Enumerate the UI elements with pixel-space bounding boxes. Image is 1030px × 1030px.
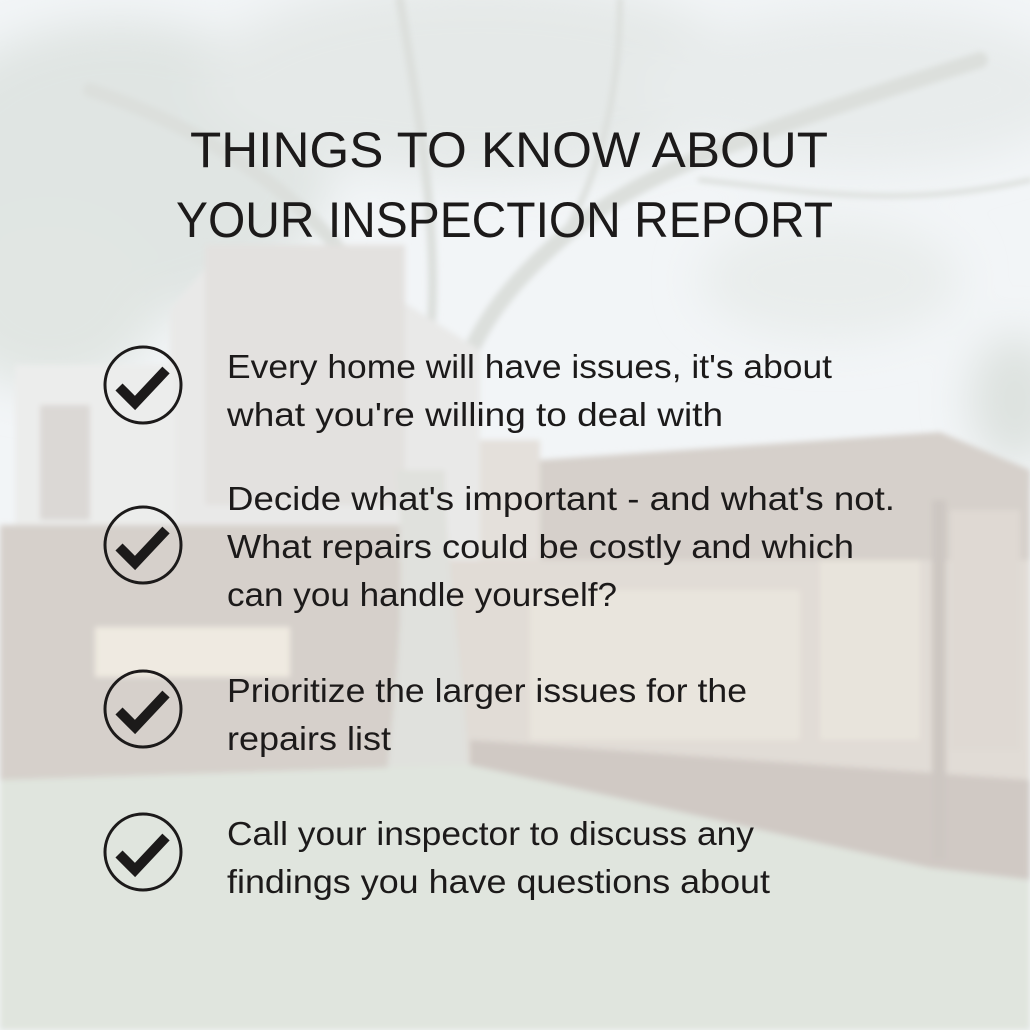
text: item 1 xyxy=(226,348,832,433)
text: item 2 xyxy=(227,480,895,613)
text: item 1: what you're willing to deal with xyxy=(226,396,723,433)
text: item 1: Every home will have issues, it's about xyxy=(227,348,832,385)
text: item 2: Decide what's important - and what's not. xyxy=(227,480,895,517)
title: YOUR INSPECTION REPORT xyxy=(176,192,833,248)
text: item 2: What repairs could be costly and which xyxy=(227,528,854,565)
text: item 3 xyxy=(227,672,747,757)
title xyxy=(176,122,833,248)
text: item 3: repairs list xyxy=(227,720,391,757)
icon: check circle 4 xyxy=(105,814,181,890)
icon: check circle 1 xyxy=(105,347,181,423)
upper house volume xyxy=(170,245,480,640)
deck xyxy=(470,740,1030,880)
grass xyxy=(0,765,1030,1030)
tree trunk xyxy=(385,470,470,790)
text: item 3: Prioritize the larger issues for the xyxy=(227,672,747,709)
lower house xyxy=(0,525,400,780)
icon: check circle 3 xyxy=(105,671,181,747)
icon: check circle 2 xyxy=(105,507,181,583)
text: item 4: Call your inspector to discuss any xyxy=(227,815,755,852)
text: item 4 xyxy=(227,815,770,900)
title: THINGS TO KNOW ABOUT xyxy=(190,122,828,178)
text: item 2: can you handle yourself? xyxy=(227,576,617,613)
left white wing xyxy=(15,365,175,535)
text: item 4: findings you have questions about xyxy=(227,863,770,900)
